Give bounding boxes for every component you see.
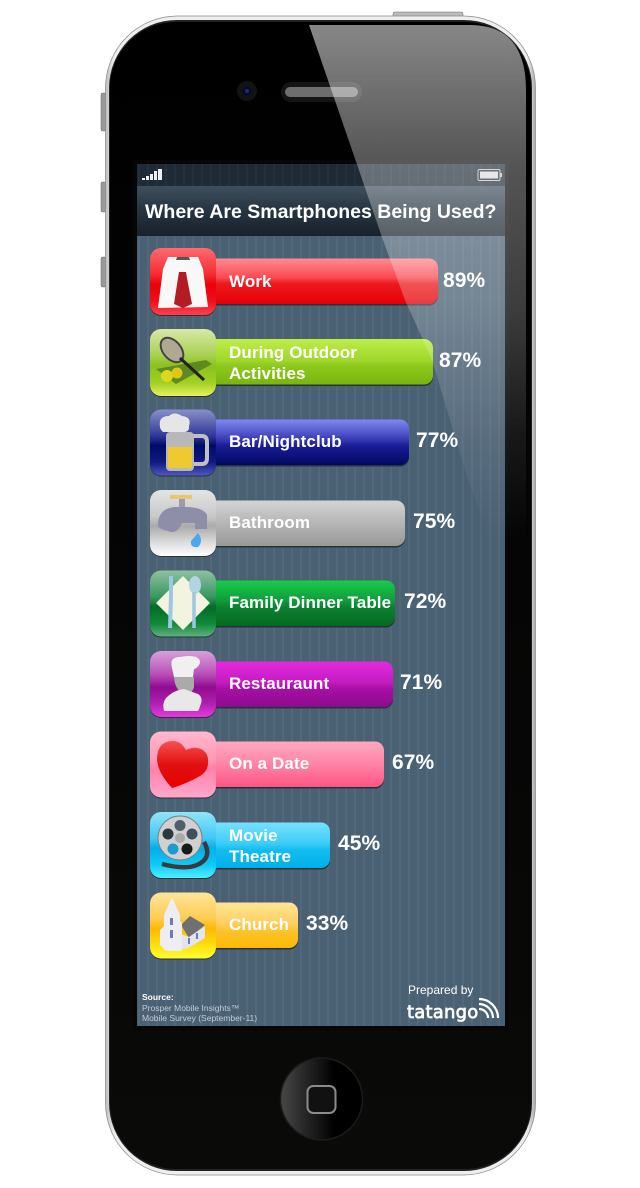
icon: beer mug: [160, 414, 207, 471]
row: During Outdoor Activities: During Outdoor: [229, 343, 357, 362]
icon: tennis racket: [156, 333, 212, 384]
row: Family Dinner Table: Family Dinner Table: [229, 593, 391, 612]
prepared by tatango logo: Prepared by: [408, 983, 473, 997]
front camera: [237, 81, 257, 101]
row: Movie Theatre: Theatre: [229, 847, 291, 866]
row: Restauraunt: Restauraunt: [229, 674, 330, 693]
row: Movie Theatre: [150, 812, 381, 879]
icon: shirt and tie: [158, 257, 208, 308]
row: Bathroom: 75%: [413, 510, 456, 533]
signal icon: [142, 169, 162, 180]
row: Bar/Nightclub: [150, 410, 459, 476]
source note: Source:: [142, 992, 174, 1002]
status bar: [137, 164, 505, 186]
icon: napkin, fork and spoon: [156, 576, 210, 630]
row: On a Date: [150, 732, 435, 798]
phone body: [101, 12, 536, 1175]
row: Bar/Nightclub: 77%: [416, 429, 459, 452]
speaker: [281, 82, 362, 102]
prepared by tatango logo: [407, 983, 498, 1023]
row: Work: [150, 248, 486, 316]
glass glare: [309, 25, 526, 570]
row: On a Date: 67%: [392, 751, 435, 774]
row: Work: 89%: [443, 269, 486, 292]
title: Where Are Smartphones Being Used?: [145, 201, 496, 223]
source note: [142, 992, 257, 1023]
row: Work: Work: [229, 272, 272, 291]
row: Movie Theatre: 45%: [338, 832, 381, 855]
row: Church: 33%: [306, 912, 349, 935]
bar chart: [150, 248, 486, 960]
row: Church: [150, 892, 349, 960]
row: Restauraunt: [150, 651, 443, 718]
title bar: [137, 186, 505, 236]
volume and power buttons: [101, 12, 463, 287]
icon: film reel: [158, 816, 207, 867]
row: Family Dinner Table: 72%: [404, 590, 447, 613]
row: Bathroom: [150, 490, 456, 557]
row: During Outdoor Activities: 87%: [439, 349, 482, 372]
row: Movie Theatre: Movie: [229, 826, 278, 845]
row: During Outdoor Activities: [150, 329, 482, 397]
row: Restauraunt: 71%: [400, 671, 443, 694]
icon: faucet: [158, 497, 207, 547]
icon: chef: [163, 656, 202, 711]
battery icon: [478, 170, 502, 180]
row: During Outdoor Activities: Activities: [229, 364, 306, 383]
row: Bathroom: Bathroom: [229, 513, 310, 532]
chart background: [137, 236, 505, 1026]
home button: [280, 1058, 362, 1140]
source note: Prosper Mobile Insights™: [142, 1003, 239, 1013]
row: On a Date: On a Date: [229, 754, 309, 773]
screen: [133, 160, 509, 1030]
icon: church: [160, 897, 205, 951]
row: Bar/Nightclub: Bar/Nightclub: [229, 432, 342, 451]
row: Church: Church: [229, 915, 289, 934]
row: Family Dinner Table: [150, 570, 447, 638]
prepared by tatango logo: tatango: [407, 1002, 478, 1023]
source note: Mobile Survey (September-11): [142, 1013, 257, 1023]
icon: heart: [157, 741, 208, 788]
